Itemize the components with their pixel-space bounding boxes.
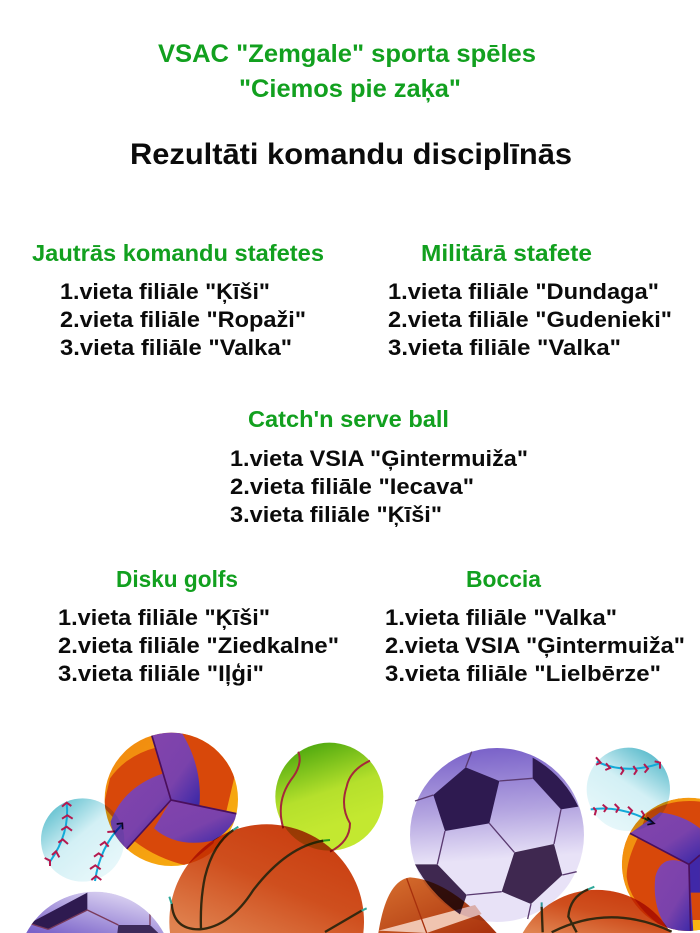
results list: 3.vieta filiāle "Lielbērze" [385,661,661,686]
icon: baseball left [41,798,124,882]
icon: basketball left [169,824,367,933]
discipline heading: Militārā stafete [421,240,592,266]
results list: 1.vieta filiāle "Ķīši" [60,279,270,304]
results list: 2.vieta filiāle "Gudenieki" [388,307,672,332]
discipline heading: Jautrās komandu stafetes [32,240,324,266]
title: VSAC "Zemgale" sporta spēles [158,40,536,68]
panel: Jautrās komandu stafetes [32,240,324,360]
results list: 2.vieta filiāle "Iecava" [230,474,474,499]
results list [230,446,528,527]
icon: basketball right [523,887,672,933]
icon: soccer ball large [410,748,584,922]
results list [60,279,306,360]
panel: Militārā stafete [388,240,672,360]
results list: 3.vieta filiāle "Valka" [60,335,292,360]
icon: baseball right [587,748,670,831]
results list: 1.vieta filiāle "Dundaga" [388,279,659,304]
results list: 1.vieta VSIA "Ģintermuiža" [230,446,528,471]
results list: 3.vieta filiāle "Valka" [388,335,621,360]
illustration: sports balls [26,730,700,933]
title: "Ciemos pie zaķa" [239,75,461,103]
icon: american football [378,877,497,933]
results list: 2.vieta filiāle "Ropaži" [60,307,306,332]
panel: Catch'n serve ball [230,406,528,527]
results list [58,605,339,686]
results list: 3.vieta filiāle "Iļģi" [58,661,264,686]
results list: 3.vieta filiāle "Ķīši" [230,502,442,527]
panel: Boccia [385,566,685,686]
icon: volleyball right [622,798,700,932]
results list: 1.vieta filiāle "Ķīši" [58,605,270,630]
results list: 2.vieta VSIA "Ģintermuiža" [385,633,685,658]
discipline heading: Boccia [466,566,541,592]
heading: results: Rezultāti komandu disciplīnās [130,138,572,171]
discipline heading: Disku golfs [116,566,238,592]
results list: 2.vieta filiāle "Ziedkalne" [58,633,339,658]
results list [385,605,685,686]
discipline heading: Catch'n serve ball [248,406,449,432]
icon: soccer ball bottom left [26,892,164,933]
icon: volleyball left [104,732,238,866]
panel: Disku golfs [58,566,339,686]
icon: tennis ball [275,743,383,852]
results list: 1.vieta filiāle "Valka" [385,605,617,630]
title [158,40,536,103]
results list [388,279,672,360]
